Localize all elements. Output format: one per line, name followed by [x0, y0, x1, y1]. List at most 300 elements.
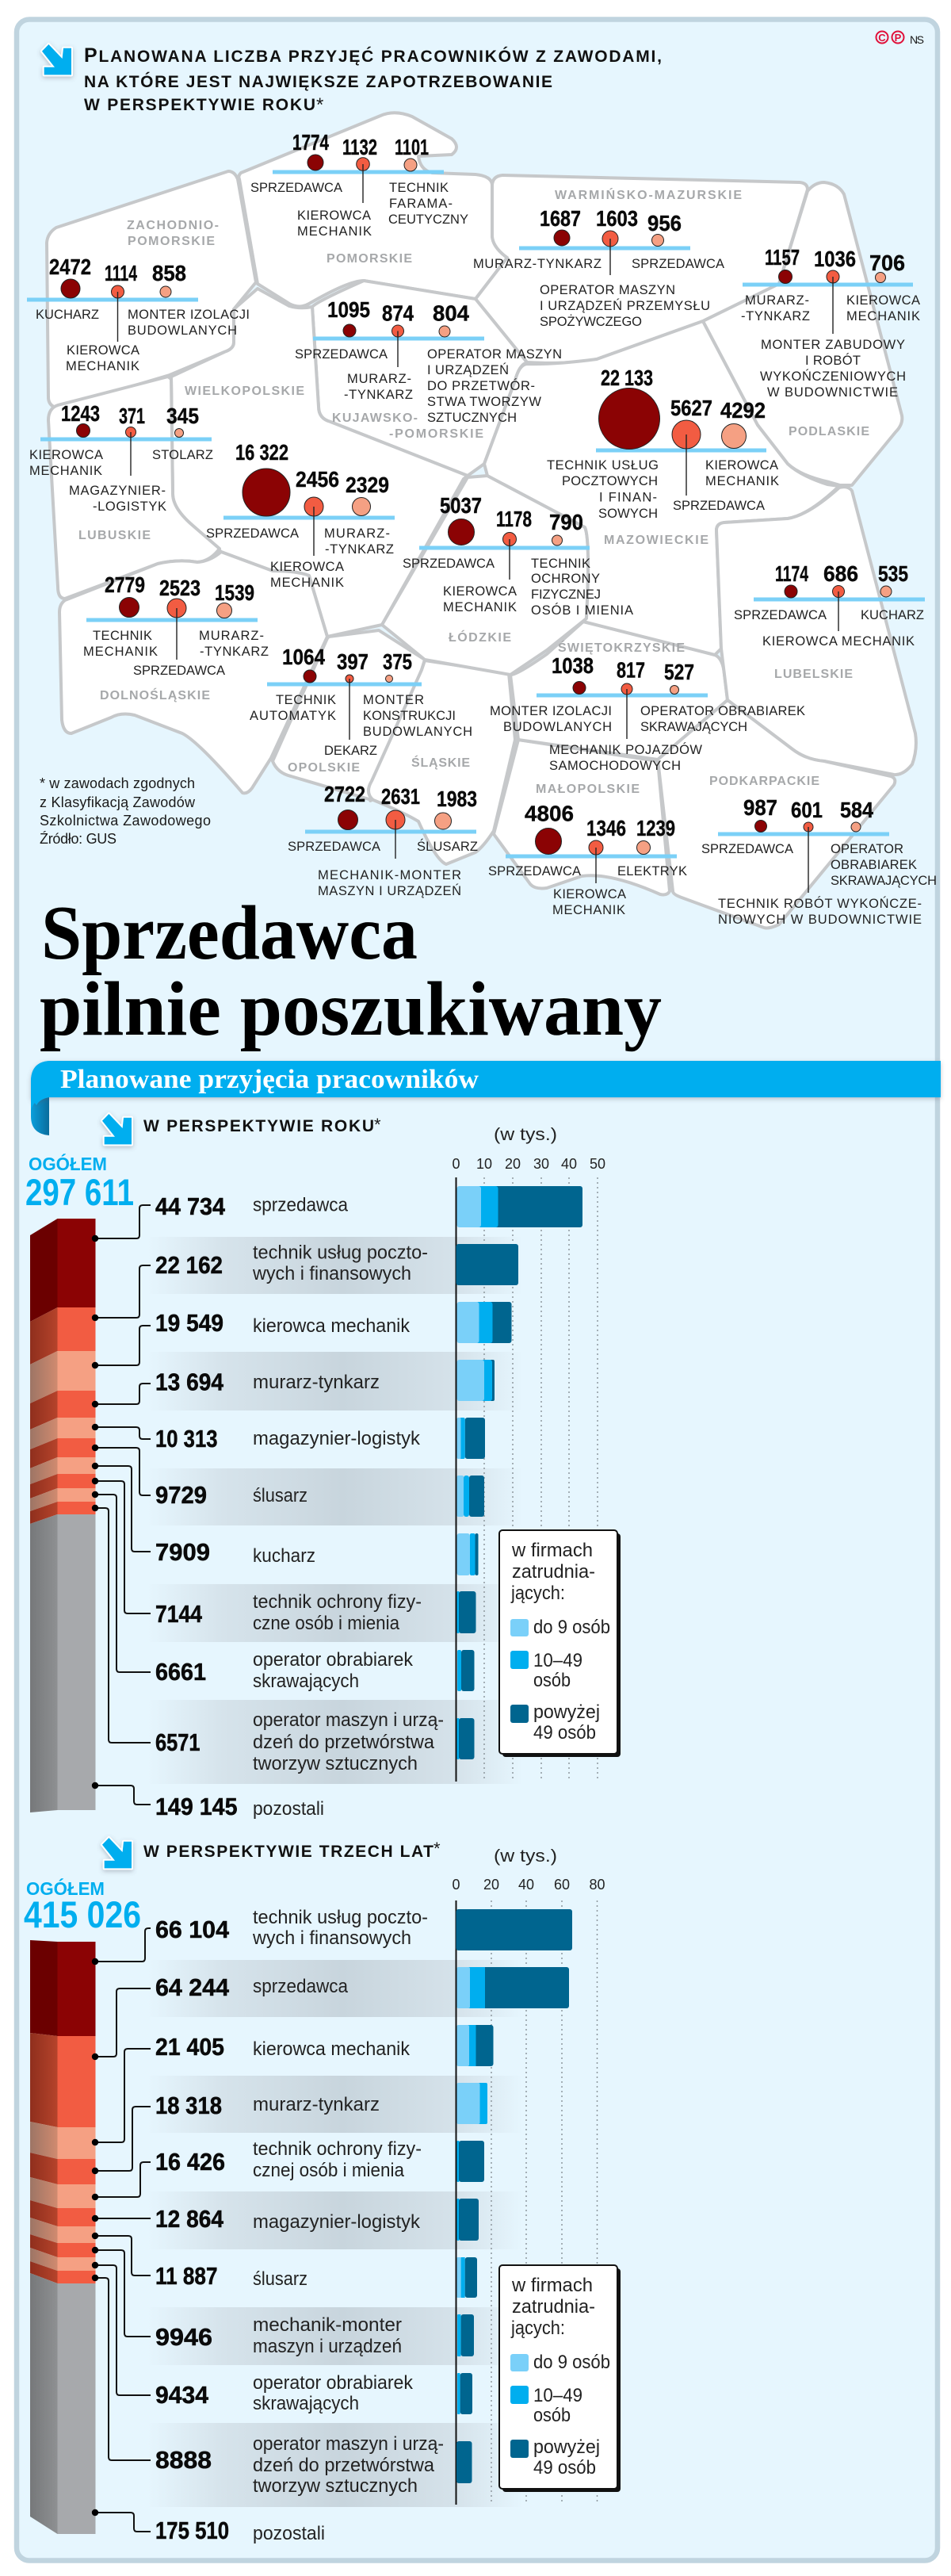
panel: mazowieckie: SPRZEDAWCA: [673, 499, 765, 513]
panel: lubelskie: LUBELSKIE: [774, 668, 853, 681]
panel: opolskie: KONSTRUKCJI: [363, 709, 456, 723]
panel: wielkopolskie: -TYNKARZ: [325, 542, 394, 557]
panel: śląskie: MASZYN I URZĄDZEŃ: [318, 883, 461, 898]
panel: podlaskie: [741, 245, 920, 438]
axis and gridlines roku: 50: [590, 1156, 605, 1172]
panel: podlaskie: -TYNKARZ: [741, 309, 810, 323]
legend roku: w firmach: [511, 1540, 593, 1561]
panel: warmińsko-mazurskie: OPERATOR MASZYN: [540, 283, 675, 297]
panel: podkarpackie: OPERATOR: [831, 842, 903, 856]
panel: warmińsko-mazurskie: MURARZ-TYNKARZ: [473, 257, 602, 271]
row labels trzech lat: sprzedawca: [253, 1976, 349, 1997]
panel: podlaskie: WYKOŃCZENIOWYCH: [760, 369, 906, 384]
panel: świętokrzyskie: MECHANIK POJAZDÓW: [549, 742, 702, 757]
panel: kujawsko-pomorskie: MURARZ-: [347, 372, 411, 386]
panel: pomorskie: FARAMA-: [389, 197, 453, 211]
panel: lubuskie: [29, 401, 213, 542]
footnote and source: [40, 775, 211, 847]
panel: dolnośląskie: -TYNKARZ: [200, 645, 269, 659]
axis and gridlines roku: (w tys.): [494, 1124, 557, 1144]
panel: mazowieckie: SOWYCH: [598, 507, 658, 521]
panel: kujawsko-pomorskie: SPRZEDAWCA: [295, 347, 388, 362]
icon: blue arrow roku: [102, 1114, 132, 1144]
panel: wielkopolskie: [185, 385, 395, 590]
row labels roku: sprzedawca: [253, 1194, 349, 1216]
panel: zachodniopomorskie: MECHANIK: [66, 359, 139, 373]
row labels trzech lat: operator maszyn i urzą-: [253, 2433, 444, 2455]
axis and gridlines trzech lat: [452, 1846, 605, 2505]
panel: warmińsko-mazurskie: 956: [647, 211, 682, 235]
logo: copyright marks and author: P: [895, 32, 902, 44]
panel: opolskie: MONTER: [363, 693, 424, 707]
axis and gridlines trzech lat: 40: [518, 1877, 534, 1893]
row labels roku: technik ochrony fizy-: [253, 1591, 422, 1613]
row values trzech lat: 9434: [155, 2381, 209, 2409]
row labels trzech lat: operator obrabiarek: [253, 2372, 414, 2394]
total trzech lat: [24, 1877, 141, 1935]
panel: mazowieckie: MAZOWIECKIE: [604, 534, 708, 547]
row labels roku: [252, 1194, 444, 1820]
row values trzech lat: 8888: [155, 2446, 212, 2474]
row labels trzech lat: [252, 1907, 444, 2544]
panel: wielkopolskie: 16 322: [235, 440, 288, 465]
panel: warmińsko-mazurskie: SPRZEDAWCA: [632, 257, 724, 271]
panel: łódzkie: MECHANIK: [443, 600, 517, 614]
row values roku: 7144: [155, 1600, 203, 1628]
panel: dolnośląskie: MECHANIK: [83, 645, 158, 659]
legend roku: jących:: [510, 1583, 565, 1604]
panel: dolnośląskie: TECHNIK: [93, 629, 152, 643]
panel: lubuskie: 345: [166, 404, 199, 428]
footnote and source: z Klasyfikacją Zawodów: [40, 794, 196, 810]
main headline: pilnie poszukiwany: [40, 966, 662, 1052]
panel: podlaskie: 1157: [765, 245, 800, 270]
row values trzech lat: 18 318: [155, 2092, 222, 2119]
panel: opolskie: 375: [383, 649, 412, 674]
panel: lubelskie: 686: [823, 561, 858, 586]
axis and gridlines trzech lat: 80: [589, 1877, 605, 1893]
panel: lubuskie: -LOGISTYK: [93, 500, 166, 514]
panel: kujawsko-pomorskie: DO PRZETWÓR-: [427, 378, 535, 393]
legend trzech lat: zatrudnia-: [512, 2296, 595, 2318]
panel: zachodniopomorskie: POMORSKIE: [128, 235, 215, 248]
panel: dolnośląskie: SPRZEDAWCA: [133, 664, 225, 678]
row labels roku: operator obrabiarek: [253, 1649, 414, 1671]
row values roku: 7909: [155, 1538, 210, 1566]
row values roku: [155, 1192, 238, 1820]
row values roku: 19 549: [155, 1309, 223, 1337]
panel: świętokrzyskie: SKRAWAJĄCYCH: [640, 720, 747, 734]
row labels trzech lat: dzeń do przetwórstwa: [253, 2455, 435, 2476]
row labels roku: czne osób i mienia: [253, 1613, 400, 1634]
panel: łódzkie: 1178: [496, 507, 532, 531]
row labels roku: murarz-tynkarz: [253, 1372, 380, 1393]
row labels trzech lat: technik ochrony fizy-: [253, 2138, 422, 2160]
chart: w perspektywie roku: [25, 1114, 621, 1820]
panel: łódzkie: OSÓB I MIENIA: [531, 603, 633, 618]
row values trzech lat: 66 104: [155, 1916, 230, 1943]
stacked bars trzech lat: [456, 1909, 572, 2483]
row labels trzech lat: murarz-tynkarz: [253, 2094, 380, 2115]
panel: wielkopolskie: WIELKOPOLSKIE: [185, 385, 304, 398]
main headline: Sprzedawca: [41, 890, 418, 976]
row labels roku: kucharz: [253, 1545, 315, 1567]
panel: pomorskie: SPRZEDAWCA: [250, 181, 342, 195]
panel: podlaskie: W BUDOWNICTWIE: [767, 385, 898, 400]
map title: PLANOWANA LICZBA PRZYJĘĆ PRACOWNIKÓW Z ZAWODAMI,: [84, 44, 662, 67]
map title: W PERSPEKTYWIE ROKU: [84, 96, 315, 114]
row labels trzech lat: ślusarz: [253, 2268, 307, 2290]
panel: małopolskie: 4806: [525, 801, 574, 826]
panel: świętokrzyskie: BUDOWLANYCH: [503, 720, 612, 734]
panel: śląskie: ŚLUSARZ: [417, 839, 478, 854]
row values trzech lat: 11 887: [155, 2262, 217, 2290]
legend roku: do 9 osób: [533, 1617, 610, 1638]
panel: kujawsko-pomorskie: 874: [382, 301, 414, 325]
map title: [84, 44, 662, 116]
legend roku: osób: [533, 1670, 571, 1691]
panel: zachodniopomorskie: 2472: [49, 255, 91, 279]
panel: podlaskie: 1036: [814, 247, 856, 271]
panel: łódzkie: [403, 493, 633, 645]
panel: mazowieckie: TECHNIK USŁUG: [547, 458, 659, 473]
panel: śląskie: 2631: [381, 784, 420, 809]
panel: kujawsko-pomorskie: 1095: [327, 297, 370, 322]
legend trzech lat: jących:: [510, 2318, 565, 2339]
row values roku: 9729: [155, 1481, 207, 1509]
panel: świętokrzyskie: 527: [664, 660, 694, 684]
panel: małopolskie: 1239: [636, 816, 675, 840]
panel: łódzkie: ŁÓDZKIE: [449, 630, 511, 645]
panel: lubelskie: KUCHARZ: [861, 608, 924, 622]
panel: podlaskie: MURARZ-: [745, 293, 809, 308]
panel: małopolskie: KIEROWCA: [553, 887, 626, 901]
panel: pomorskie: TECHNIK: [389, 181, 449, 195]
panel: opolskie: BUDOWLANYCH: [363, 725, 472, 739]
legend trzech lat: powyżej: [533, 2436, 600, 2458]
panel: pomorskie: CEUTYCZNY: [388, 212, 468, 227]
panel: warmińsko-mazurskie: SPOŻYWCZEGO: [540, 314, 642, 329]
row labels trzech lat: skrawających: [253, 2393, 359, 2414]
panel: zachodniopomorskie: [27, 219, 250, 373]
panel: świętokrzyskie: [490, 640, 805, 773]
total roku: [25, 1153, 134, 1213]
row values roku: 6661: [155, 1658, 206, 1686]
axis and gridlines trzech lat: (w tys.): [494, 1846, 557, 1866]
row values trzech lat: [155, 1916, 230, 2544]
panel: mazowieckie: 22 133: [601, 366, 653, 390]
panel: podkarpackie: 987: [743, 795, 777, 820]
panel: śląskie: SPRZEDAWCA: [288, 840, 380, 854]
row values trzech lat: 12 864: [155, 2205, 224, 2233]
panel: lubelskie: 1174: [775, 561, 808, 586]
panel: zachodniopomorskie: KUCHARZ: [36, 308, 99, 322]
icon: blue arrow trzech lat: [102, 1838, 132, 1868]
row labels roku: wych i finansowych: [252, 1263, 411, 1284]
panel: kujawsko-pomorskie: KUJAWSKO-: [332, 411, 418, 425]
panel: mazowieckie: [547, 366, 779, 547]
panel: podkarpackie: 584: [840, 798, 873, 822]
panel: warmińsko-mazurskie: I URZĄDZEŃ PRZEMYSŁU: [540, 298, 710, 313]
panel: pomorskie: [250, 130, 468, 266]
row labels roku: kierowca mechanik: [253, 1315, 411, 1337]
panel: dolnośląskie: 1539: [215, 580, 254, 605]
panel: podkarpackie: [701, 775, 937, 927]
row labels trzech lat: mechanik-monter: [253, 2314, 402, 2336]
row labels roku: ślusarz: [253, 1485, 307, 1506]
row labels trzech lat: tworzyw sztucznych: [253, 2475, 418, 2497]
panel: opolskie: AUTOMATYK: [250, 709, 336, 723]
panel: pomorskie: POMORSKIE: [327, 252, 412, 266]
panel: opolskie: [250, 645, 472, 775]
panel: kujawsko-pomorskie: STWA TWORZYW: [427, 395, 541, 409]
row values roku: 44 734: [155, 1192, 226, 1220]
panel: opolskie: DEKARZ: [324, 744, 377, 758]
row bands roku: [147, 1237, 523, 1784]
panel: wielkopolskie: 2456: [296, 467, 339, 492]
panel: podlaskie: I ROBÓT: [805, 353, 861, 368]
row labels roku: skrawających: [253, 1671, 359, 1692]
axis and gridlines trzech lat: 0: [452, 1877, 460, 1893]
axis and gridlines roku: 0: [452, 1156, 460, 1172]
panel: łódzkie: 5037: [440, 493, 482, 518]
panel: śląskie: [288, 755, 478, 898]
panel: lubelskie: 535: [878, 561, 908, 586]
panel: małopolskie: SPRZEDAWCA: [488, 864, 581, 878]
row labels roku: pozostali: [253, 1798, 324, 1820]
panel: małopolskie: 1346: [586, 816, 626, 840]
stacked bars roku: [456, 1186, 582, 1759]
row labels trzech lat: kierowca mechanik: [253, 2038, 411, 2060]
panel: małopolskie: MAŁOPOLSKIE: [536, 783, 640, 796]
row values roku: 10 313: [155, 1425, 217, 1453]
panel: lubelskie: KIEROWCA MECHANIK: [762, 634, 915, 649]
panel: zachodniopomorskie: 858: [152, 261, 186, 285]
panel: dolnośląskie: MURARZ-: [199, 629, 264, 643]
panel: podkarpackie: SKRAWAJĄCYCH: [831, 874, 937, 888]
panel: opolskie: 1064: [282, 645, 325, 669]
panel: warmińsko-mazurskie: [473, 187, 742, 329]
panel: łódzkie: OCHRONY: [531, 572, 600, 586]
panel: łódzkie: TECHNIK: [531, 557, 590, 571]
panel: lubelskie: SPRZEDAWCA: [734, 608, 827, 622]
row labels roku: tworzyw sztucznych: [253, 1753, 418, 1774]
row values trzech lat: 175 510: [155, 2517, 229, 2544]
map title: NA KTÓRE JEST NAJWIĘKSZE ZAPOTRZEBOWANIE: [84, 72, 552, 91]
panel: pomorskie: KIEROWCA: [297, 209, 371, 223]
panel: wielkopolskie: MURARZ-: [324, 526, 390, 541]
chart: w perspektywie trzech lat: [24, 1838, 621, 2544]
subheading roku: W PERSPEKTYWIE ROKU: [143, 1117, 374, 1135]
row values trzech lat: 21 405: [155, 2033, 224, 2061]
axis and gridlines roku: 20: [505, 1156, 521, 1172]
main headline: [40, 890, 662, 1052]
panel: śląskie: ŚLĄSKIE: [411, 755, 470, 770]
legend trzech lat: 49 osób: [533, 2457, 596, 2478]
panel: kujawsko-pomorskie: -POMORSKIE: [389, 427, 483, 441]
legend trzech lat: 10–49: [533, 2385, 582, 2406]
legend roku: powyżej: [533, 1701, 600, 1723]
panel: wielkopolskie: MECHANIK: [270, 576, 344, 590]
panel: zachodniopomorskie: ZACHODNIO-: [127, 219, 219, 232]
panel: lubuskie: 371: [119, 404, 145, 428]
row values roku: 13 694: [155, 1368, 224, 1395]
logo: copyright marks and author: [877, 32, 924, 46]
row labels trzech lat: pozostali: [253, 2523, 325, 2544]
connectors roku: [92, 1205, 151, 1805]
panel: kujawsko-pomorskie: SZTUCZNYCH: [427, 411, 517, 425]
row labels trzech lat: wych i finansowych: [252, 1927, 411, 1949]
total roku: OGÓŁEM: [29, 1153, 107, 1174]
logo: copyright marks and author: C: [878, 32, 886, 44]
panel: warmińsko-mazurskie: 1603: [596, 206, 638, 231]
panel: śląskie: 1983: [437, 787, 477, 811]
stacked column roku: [30, 1219, 95, 1812]
axis and gridlines trzech lat: 20: [483, 1877, 499, 1893]
total roku: 297 611: [25, 1171, 134, 1213]
panel: kujawsko-pomorskie: OPERATOR MASZYN: [427, 347, 562, 362]
panel: mazowieckie: 5627: [670, 396, 712, 420]
panel: zachodniopomorskie: KIEROWCA: [67, 343, 139, 358]
axis and gridlines roku: 10: [476, 1156, 492, 1172]
section header ribbon: Planowane przyjęcia pracowników: [60, 1065, 479, 1094]
panel: zachodniopomorskie: 1114: [105, 261, 137, 285]
panel: kujawsko-pomorskie: -TYNKARZ: [344, 388, 413, 402]
panel: pomorskie: 1101: [395, 135, 429, 159]
panel: podlaskie: 706: [869, 251, 905, 275]
panel: mazowieckie: POCZTOWYCH: [562, 474, 658, 488]
legend roku: [499, 1530, 621, 1757]
panel: warmińsko-mazurskie: WARMIŃSKO-MAZURSKIE: [555, 187, 742, 202]
panel: wielkopolskie: 2329: [346, 473, 389, 497]
panel: kujawsko-pomorskie: [295, 297, 562, 441]
legend trzech lat: w firmach: [511, 2275, 593, 2296]
panel: śląskie: 2722: [324, 782, 365, 806]
panel: małopolskie: ELEKTRYK: [617, 864, 687, 878]
panel: mazowieckie: KIEROWCA: [705, 458, 778, 473]
panel: podlaskie: KIEROWCA: [846, 293, 920, 308]
panel: podkarpackie: PODKARPACKIE: [709, 775, 819, 788]
axis and gridlines roku: 30: [533, 1156, 549, 1172]
panel: podkarpackie: 601: [791, 798, 823, 822]
panel: dolnośląskie: DOLNOŚLĄSKIE: [100, 687, 210, 702]
legend trzech lat: osób: [533, 2405, 571, 2426]
legend roku: 49 osób: [533, 1722, 596, 1743]
panel: łódzkie: KIEROWCA: [443, 584, 517, 599]
panel: lubuskie: 1243: [61, 401, 100, 426]
panel: wielkopolskie: KIEROWCA: [270, 560, 344, 574]
panel: podkarpackie: NIOWYCH W BUDOWNICTWIE: [718, 913, 922, 927]
panel: śląskie: MECHANIK-MONTER: [318, 868, 461, 882]
panel: dolnośląskie: 2779: [105, 572, 145, 597]
legend roku: zatrudnia-: [512, 1561, 595, 1583]
subheading trzech lat: W PERSPEKTYWIE TRZECH LAT: [143, 1843, 433, 1861]
footnote and source: * w zawodach zgodnych: [40, 775, 195, 791]
axis and gridlines trzech lat: 60: [554, 1877, 570, 1893]
axis and gridlines roku: [452, 1124, 605, 1782]
panel: opolskie: 397: [337, 649, 369, 674]
panel: wielkopolskie: SPRZEDAWCA: [206, 526, 299, 541]
panel: podkarpackie: TECHNIK ROBÓT WYKOŃCZE-: [718, 896, 922, 911]
row labels roku: technik usług poczto-: [253, 1242, 428, 1264]
row values trzech lat: 64 244: [155, 1973, 230, 2001]
legend trzech lat: do 9 osób: [533, 2352, 610, 2373]
axis and gridlines roku: 40: [561, 1156, 577, 1172]
panel: świętokrzyskie: 817: [617, 658, 645, 682]
panel: kujawsko-pomorskie: I URZĄDZEŃ: [427, 362, 509, 377]
panel: podlaskie: PODLASKIE: [789, 425, 869, 438]
row labels trzech lat: technik usług poczto-: [253, 1907, 428, 1928]
logo: copyright marks and author: NS: [910, 33, 924, 46]
panel: lubelskie: [734, 561, 925, 681]
panel: mazowieckie: I FINAN-: [599, 490, 657, 504]
stacked column trzech lat: [30, 1940, 95, 2534]
legend roku: 10–49: [533, 1650, 582, 1671]
row values trzech lat: 9946: [155, 2323, 212, 2351]
panel: pomorskie: 1132: [342, 135, 377, 159]
row labels roku: magazynier-logistyk: [253, 1428, 421, 1449]
panel: opolskie: OPOLSKIE: [288, 761, 360, 775]
subheading trzech lat: *: [433, 1839, 441, 1858]
row values roku: 6571: [155, 1728, 200, 1756]
panel: świętokrzyskie: 1038: [552, 653, 594, 678]
panel: dolnośląskie: [83, 572, 269, 702]
panel: małopolskie: MECHANIK: [552, 903, 625, 917]
panel: łódzkie: SPRZEDAWCA: [403, 557, 495, 571]
footnote and source: Źródło: GUS: [40, 831, 116, 847]
row values roku: 149 145: [155, 1793, 238, 1820]
panel: podlaskie: MONTER ZABUDOWY: [761, 338, 905, 352]
panel: lubuskie: MAGAZYNIER-: [69, 484, 166, 498]
row values trzech lat: 16 426: [155, 2148, 225, 2176]
map title: *: [316, 94, 323, 116]
panel: lubuskie: LUBUSKIE: [78, 529, 151, 542]
total trzech lat: 415 026: [24, 1893, 141, 1935]
panel: pomorskie: MECHANIK: [297, 224, 372, 239]
panel: podkarpackie: OBRABIAREK: [831, 858, 917, 872]
panel: lubuskie: MECHANIK: [29, 464, 102, 478]
panel: warmińsko-mazurskie: 1687: [540, 206, 581, 231]
panel: dolnośląskie: 2523: [159, 576, 201, 600]
panel: podkarpackie: SPRZEDAWCA: [701, 842, 793, 856]
total trzech lat: OGÓŁEM: [26, 1877, 105, 1899]
panel: świętokrzyskie: OPERATOR OBRABIAREK: [640, 704, 805, 718]
connectors trzech lat: [92, 1928, 151, 2532]
panel: opolskie: TECHNIK: [276, 693, 336, 707]
row labels trzech lat: cznej osób i mienia: [253, 2160, 405, 2181]
panel: pomorskie: 1774: [292, 130, 329, 155]
panel: kujawsko-pomorskie: 804: [433, 301, 469, 325]
footnote and source: Szkolnictwa Zawodowego: [40, 813, 211, 829]
row labels roku: dzeń do przetwórstwa: [253, 1732, 435, 1753]
panel: lubuskie: KIEROWCA: [29, 448, 103, 462]
panel: zachodniopomorskie: MONTER IZOLACJI: [128, 308, 250, 322]
row labels trzech lat: magazynier-logistyk: [253, 2211, 421, 2233]
subheading roku: *: [374, 1115, 381, 1135]
row bands trzech lat: [147, 1960, 523, 2507]
panel: zachodniopomorskie: BUDOWLANYCH: [128, 323, 237, 338]
panel: lubuskie: STOLARZ: [152, 448, 213, 462]
icon: blue arrow map title: [42, 44, 71, 75]
panel: łódzkie: FIZYCZNEJ: [531, 588, 601, 602]
panel: mazowieckie: 4292: [720, 398, 766, 423]
panel: łódzkie: 790: [549, 510, 583, 534]
panel: podlaskie: MECHANIK: [846, 309, 920, 323]
legend trzech lat: [499, 2265, 621, 2492]
row labels trzech lat: maszyn i urządzeń: [253, 2336, 402, 2357]
panel: mazowieckie: MECHANIK: [705, 474, 779, 488]
panel: świętokrzyskie: SAMOCHODOWYCH: [549, 759, 681, 773]
